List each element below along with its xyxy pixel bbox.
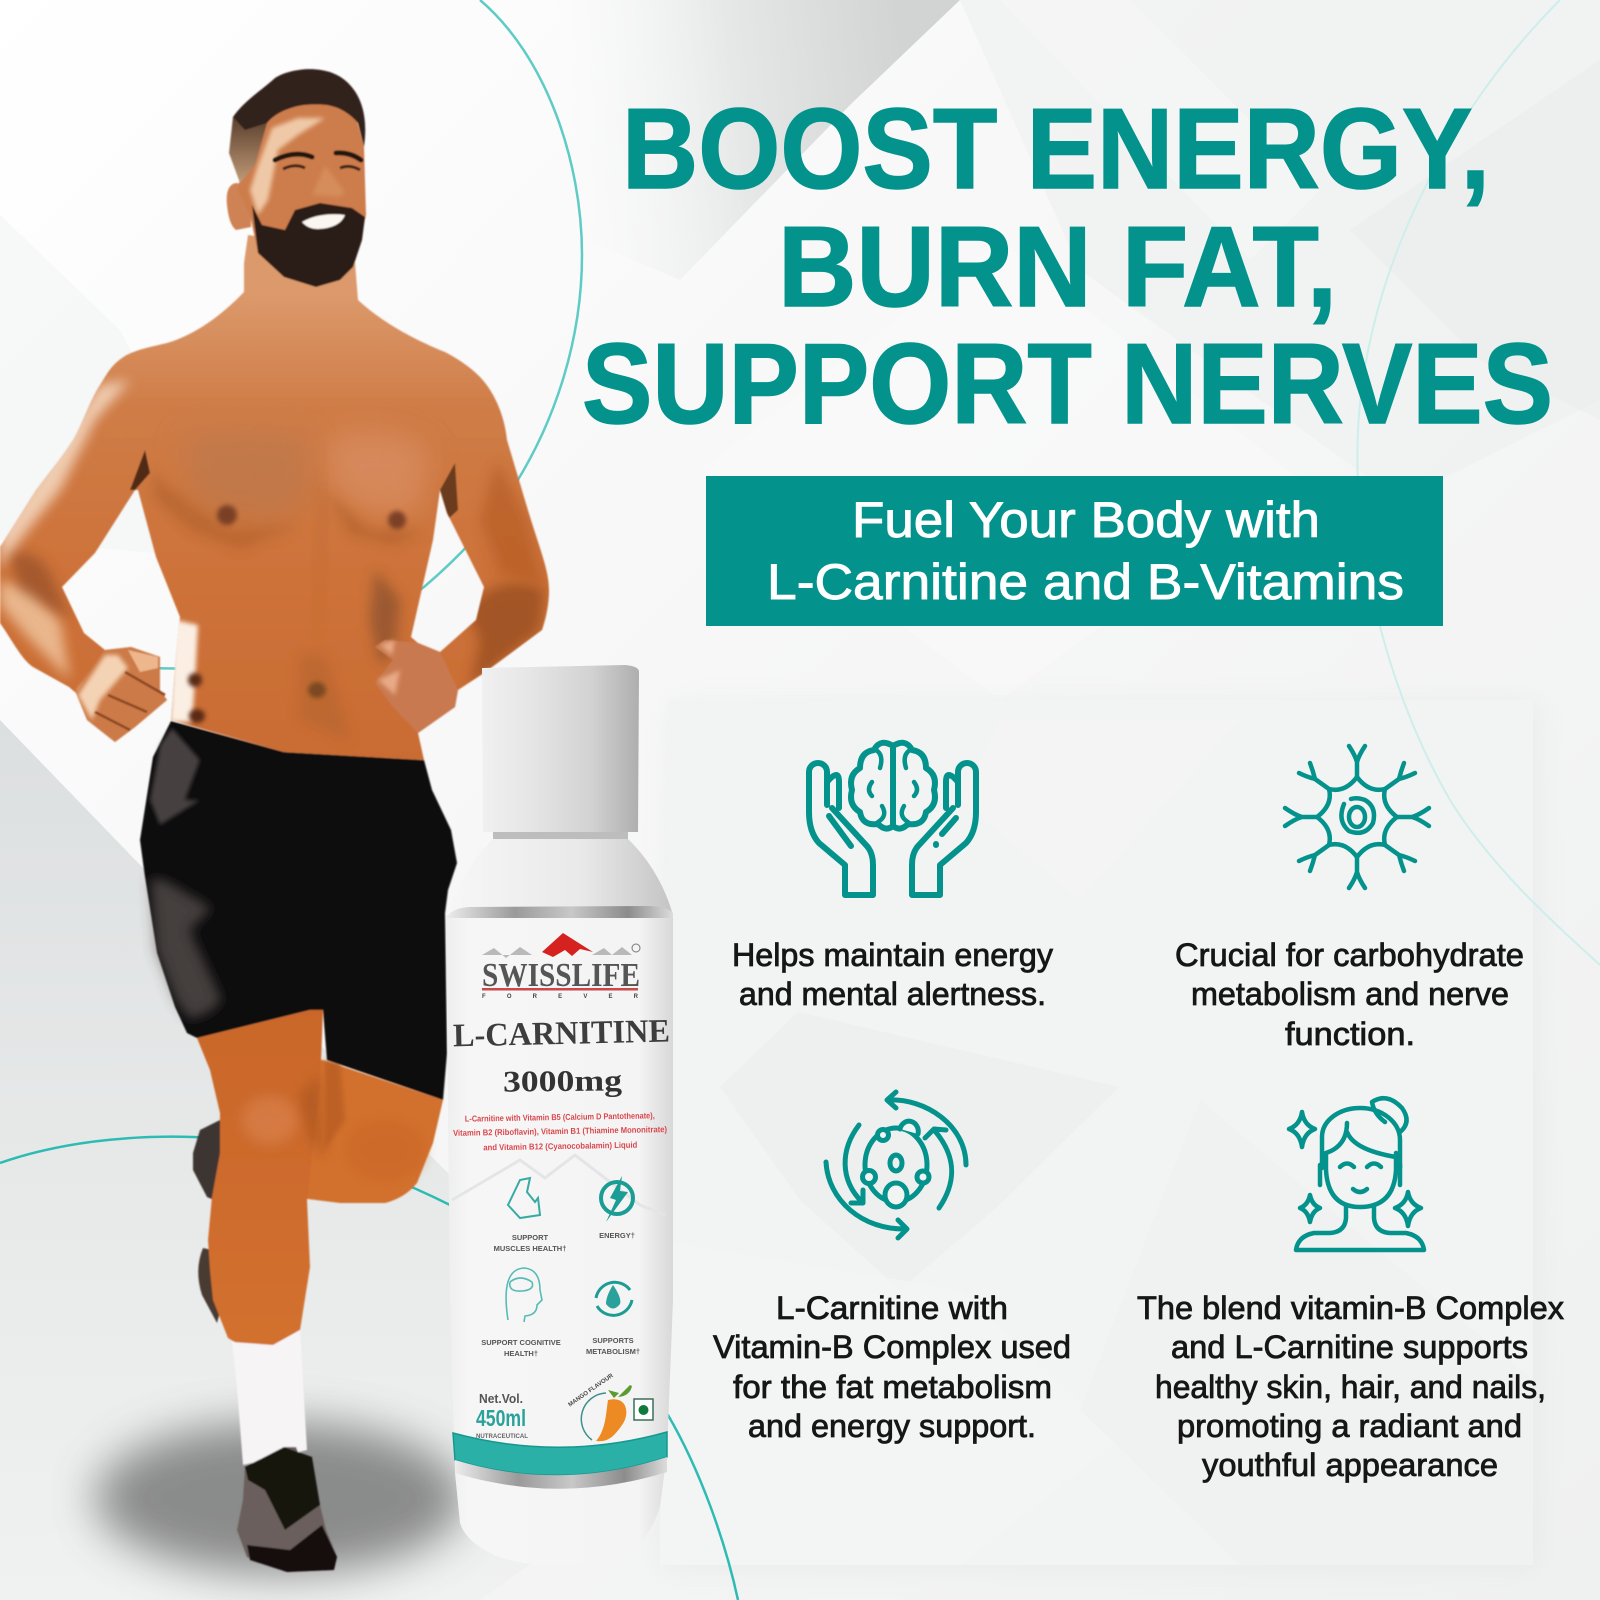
eyebrows <box>275 153 361 160</box>
sock <box>232 1330 307 1465</box>
bottle body <box>446 913 673 1566</box>
net volume: Net.Vol. <box>479 1391 523 1406</box>
label: cognitive: SUPPORT COGNITIVE <box>481 1338 561 1347</box>
text: benefit 1 <box>732 937 1053 1012</box>
benefit 3 <box>713 1092 1071 1444</box>
shorts <box>140 721 457 1100</box>
text: benefit 3: Vitamin-B Complex used <box>713 1329 1071 1365</box>
pale teal arc: right <box>1357 0 1600 965</box>
text: benefit 4: promoting a radiant and <box>1177 1408 1522 1444</box>
headline: BOOST ENERGY, <box>622 86 1490 213</box>
icon: metabolism <box>596 1282 632 1315</box>
subheading banner: Fuel Your Body with <box>852 492 1320 548</box>
text: benefit 1: Helps maintain energy <box>732 937 1053 973</box>
text: benefit 2 <box>1175 937 1524 1052</box>
benefit 2 <box>1175 746 1524 1052</box>
temple fade <box>229 117 267 183</box>
ingredients <box>453 1110 667 1153</box>
text: benefit 3: for the fat metabolism <box>733 1369 1052 1405</box>
nose <box>312 165 345 197</box>
face highlight <box>250 118 325 215</box>
label: muscles: MUSCLES HEALTH† <box>494 1244 566 1253</box>
icon: neuron <box>1285 746 1429 888</box>
brand logo <box>482 933 640 1000</box>
teal band <box>453 1432 667 1475</box>
label: metabolism: METABOLISM† <box>586 1347 640 1356</box>
highlights and shadows <box>0 380 545 740</box>
ingredients: and Vitamin B12 (Cyanocobalamin) Liquid <box>483 1140 637 1152</box>
decorative panel behind benefits <box>660 700 1537 1567</box>
icon: woman with sparkles <box>1289 1098 1424 1250</box>
text: benefit 4: The blend vitamin-B Complex <box>1137 1290 1564 1326</box>
leg shading <box>242 1060 425 1180</box>
teal arc: upper <box>153 0 582 668</box>
benefit 4 <box>1137 1098 1564 1483</box>
front shoe <box>237 1447 337 1572</box>
text: benefit 4: youthful appearance <box>1202 1447 1498 1483</box>
icon: hands holding brain <box>809 743 976 895</box>
text: benefit 2: function. <box>1285 1016 1415 1052</box>
subheading banner: L-Carnitine and B-Vitamins <box>767 554 1404 610</box>
rear shoe <box>193 1120 226 1323</box>
right fist <box>375 640 458 733</box>
eyes <box>283 166 360 170</box>
text: benefit 4 <box>1137 1290 1564 1483</box>
beard <box>252 203 365 287</box>
icon: energy <box>601 1176 633 1222</box>
upper body <box>0 234 550 762</box>
text: benefit 3: and energy support. <box>748 1408 1036 1444</box>
product bottle <box>446 665 673 1566</box>
brand logo: SWISSLIFE <box>482 957 640 994</box>
hair <box>233 69 365 147</box>
ingredients: Vitamin B2 (Riboflavin), Vitamin B1 (Thiamine Mononitrate) <box>453 1124 667 1138</box>
front leg <box>197 1010 323 1345</box>
net volume: 450ml <box>476 1405 526 1431</box>
mango flavour badge: MANGO FLAVOUR <box>568 1373 615 1408</box>
silver band <box>455 1457 667 1489</box>
label: metabolism <box>586 1336 640 1356</box>
floor shadow <box>95 1422 465 1574</box>
net volume <box>476 1391 528 1440</box>
head <box>227 69 366 287</box>
silver collar <box>447 906 673 918</box>
dosage: 3000mg <box>503 1064 622 1099</box>
nipples and navel <box>217 505 406 698</box>
headline <box>582 86 1553 448</box>
subheading banner <box>706 476 1443 626</box>
bottle cap <box>482 665 639 832</box>
label: muscles: SUPPORT <box>512 1233 549 1242</box>
shorts highlight <box>150 878 222 1020</box>
bottle neck ring <box>493 832 628 839</box>
label: metabolism: SUPPORTS <box>592 1336 634 1345</box>
label: cognitive: HEALTH† <box>504 1349 538 1358</box>
face <box>238 95 366 287</box>
label: energy: ENERGY† <box>599 1231 635 1240</box>
ingredients: L-Carnitine with Vitamin B5 (Calcium D Pantothenate), <box>465 1110 655 1124</box>
rear leg <box>300 1060 443 1203</box>
teal arc: lower <box>0 1137 738 1600</box>
net volume: NUTRACEUTICAL <box>476 1433 528 1440</box>
brand logo: FOREVER <box>482 994 639 1000</box>
headline: BURN FAT, <box>778 204 1337 331</box>
text: benefit 2: Crucial for carbohydrate <box>1175 937 1524 973</box>
benefit 1 <box>732 743 1053 1012</box>
text: benefit 3: L-Carnitine with <box>776 1290 1008 1326</box>
icon: muscle <box>508 1178 540 1218</box>
mountains on label <box>452 1155 665 1215</box>
veg mark <box>634 1399 653 1420</box>
label: muscles <box>494 1233 566 1253</box>
text: benefit 2: metabolism and nerve <box>1191 976 1509 1012</box>
icon: metabolism cycle <box>826 1092 966 1238</box>
product name: L-CARNITINE <box>453 1014 670 1054</box>
runner <box>0 69 600 1572</box>
mango flavour badge <box>568 1373 632 1441</box>
text: benefit 1: and mental alertness. <box>739 976 1046 1012</box>
label: cognitive <box>481 1338 561 1358</box>
text: benefit 3 <box>713 1290 1071 1444</box>
text: benefit 4: and L-Carnitine supports <box>1171 1329 1528 1365</box>
ear <box>227 183 251 230</box>
left fist <box>76 647 167 742</box>
icon: head <box>506 1268 542 1322</box>
text: benefit 4: healthy skin, hair, and nails, <box>1155 1369 1546 1405</box>
bottle shoulder <box>446 839 673 917</box>
smile <box>302 214 345 229</box>
